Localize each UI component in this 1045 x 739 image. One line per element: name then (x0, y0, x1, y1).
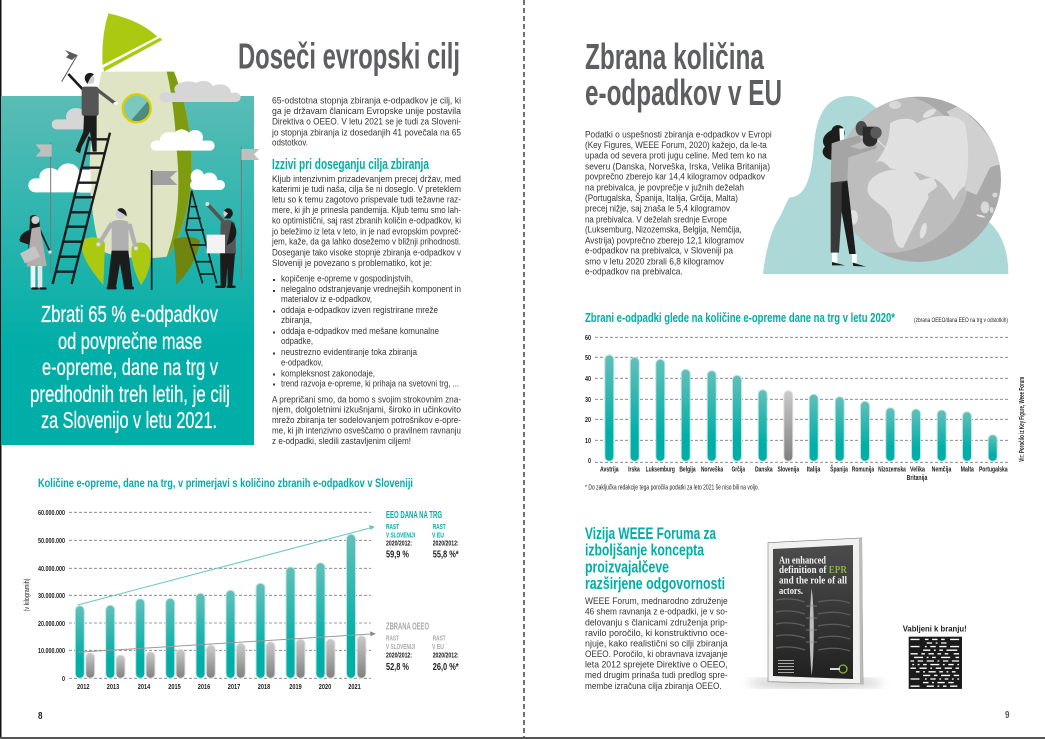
teal blob (763, 96, 1008, 274)
text block: EU overview: severu (Danska, Norveška, Irska, Velika Britanija) (585, 161, 770, 171)
list: problems: odpadke, (281, 336, 313, 346)
text block: challenges: Doseganje tako visoke stopnje zbiranja e-odpadkov v (272, 247, 461, 257)
text block: WEEE Forum: OEEO. Poročilo, ki obravnava izvajanje (585, 649, 728, 659)
text block: WEEE Forum: leta 2012 sprejete Direktive o OEEO, (585, 659, 728, 669)
goal statement: e-opreme, dane na trg v (42, 354, 218, 380)
book title: An enhanced (779, 555, 826, 566)
text block: EU overview: e-odpadkov na prebivalca, v Sloveniji pa (585, 246, 733, 256)
y axis unit: (v kilogramih) (22, 578, 31, 612)
text block: closing: mrežo zbiranja ter sodelovanjem potrošnikov e-opre- (272, 415, 461, 425)
heading: WEEE Forum vision: izboljšanje koncepta (585, 541, 704, 560)
text block: EU overview: e-odpadkov na prebivalca. (585, 267, 683, 277)
country labels: Irska (628, 465, 640, 474)
person: man with paper (205, 202, 236, 288)
text block: closing: z e-odpadki, sledili zastavljenim ciljem! (272, 436, 411, 446)
title: right page: e-odpadkov v EU (585, 72, 782, 113)
list: problems: e-odpadkov, (281, 357, 323, 367)
legend: EEE on market: RAST (433, 522, 446, 531)
country labels: Portugalska (979, 465, 1008, 474)
legend: collected WEEE: V SLOVENIJI (386, 642, 415, 651)
text block: intro: Direktiva o OEEO. V letu 2021 se je tudi za Sloveni- (272, 117, 461, 127)
text block: WEEE Forum: 46 shem ravnanja z e-odpadki, je v so- (585, 607, 728, 617)
text block: EU overview (585, 129, 772, 277)
text block: EU overview: precej nižje, saj znaša le 5,4 kilogramov (585, 204, 730, 214)
legend: collected WEEE: 2020/2012: (386, 651, 412, 660)
list: problems: nelegalno odstranjevanje vrednejših komponent in (281, 284, 461, 294)
heading: WEEE Forum vision (585, 524, 725, 593)
y axis labels: 50 (585, 353, 591, 362)
arrow: collected trend (78, 631, 376, 652)
country labels: Danska (755, 465, 773, 474)
list: problems: trend razvoja e-opreme, ki prihaja na svetovni trg, ... (281, 378, 459, 388)
list: problems: kopičenje e-opreme v gospodinjstvih, (281, 273, 413, 283)
y axis labels (585, 333, 591, 465)
text block: challenges: jem, kaže, da ga lahko dosežemo v bližnji prihodnosti. (271, 237, 461, 247)
y axis labels: 30.000.000 (38, 591, 65, 600)
legend: EEE on market: 59,9 % (386, 549, 409, 561)
y axis labels: 30 (585, 395, 591, 404)
footnote: * Do zaključka redakcije tega poročila podatki za leto 2021 še niso bili na voljo. (585, 482, 759, 491)
text block: closing (272, 394, 461, 446)
country labels: Luksemburg (646, 465, 675, 474)
y axis labels: 50.000.000 (38, 536, 65, 545)
text block: closing: njem, dolgoletnimi izkušnjami, široko in učinkovito (272, 404, 461, 414)
text block: challenges (271, 174, 461, 268)
legend: EEE on market: V SLOVENIJI (386, 531, 415, 540)
goal statement: predhodnih treh letih, je cilj (30, 381, 230, 407)
heading: WEEE Forum vision: razširjene odgovornosti (585, 574, 725, 593)
goal statement: Zbrati 65 % e-odpadkov (41, 301, 218, 327)
book small print (778, 660, 794, 673)
y axis labels: 20.000.000 (38, 619, 65, 628)
text block: intro: jo stopnja zbiranja iz dosedanjih 41 povečala na 65 (271, 127, 461, 137)
list: problems: materialov iz e-odpadkov, (281, 294, 372, 304)
heading: bottom chart: Količine e-opreme, dane na trg, v primerjavi s količino zbranih e-odpadkov v Sloveniji (38, 476, 413, 490)
QR call to action: Vabljeni k branju! (903, 624, 967, 634)
y axis labels: 0 (62, 674, 65, 683)
list: problems (273, 273, 461, 388)
text block: intro: 65-odstotna stopnja zbiranja e-odpadkov je cilj, ki (272, 96, 461, 106)
country labels: Belgija (679, 465, 696, 474)
x axis labels: 2021 (348, 682, 361, 691)
legend: collected WEEE: RAST (386, 634, 399, 643)
text block: WEEE Forum: med drugim prinaša tudi predlog spre- (585, 670, 728, 680)
legend: collected WEEE: V EU (432, 642, 444, 651)
text block: EU overview: smo v letu 2020 zbrali 6,8 kilogramov (585, 256, 724, 266)
text block: EU overview: (Portugalska, Španija, Italija, Grčija, Malta) (585, 193, 738, 203)
country labels: Romunija (852, 465, 875, 474)
list: problems: kompleksnost zakonodaje, (281, 368, 375, 378)
text block: EU overview: na prebivalca, je povprečje v južnih deželah (585, 182, 744, 192)
illustration: woman pinning globe (763, 93, 1008, 274)
x axis labels: 2020 (319, 682, 331, 691)
country labels: Španija (830, 465, 848, 474)
legend: collected WEEE: ZBRANA OEEO (386, 620, 429, 632)
country labels: Malta (961, 465, 975, 474)
x axis labels: 2015 (168, 682, 181, 691)
text block: WEEE Forum: WEEE Forum, mednarodno združenje (585, 596, 728, 606)
x axis labels: 2019 (289, 682, 302, 691)
list: problems: oddaja e-odpadkov med mešane komunalne (281, 326, 439, 336)
icon: porthole (123, 94, 151, 122)
text block: WEEE Forum: njuje, kako realistični so cilji zbiranja (585, 638, 728, 648)
chart: EEE on market vs collected (22, 508, 376, 691)
legend: EEE on market (386, 509, 459, 561)
text block: WEEE Forum: ravilo poročilo, ki konstruktivno oce- (585, 628, 728, 638)
heading: WEEE Forum vision: proizvajalčeve (585, 557, 669, 576)
illustration: rocket with people (20, 13, 259, 290)
country labels (600, 465, 1008, 482)
page number 8: 8 (38, 710, 43, 722)
list: problems: oddaja e-odpadkov izven registrirane mreže (281, 305, 438, 315)
text block: challenges: Kljub intenzivnim prizadevanjem precej držav, med (272, 174, 461, 184)
text block: challenges: katerimi je tudi naša, cilja še ni doseglo. V preteklem (272, 184, 461, 194)
legend: collected WEEE: 26,0 %* (433, 661, 459, 673)
heading: WEEE Forum vision: Vizija WEEE Foruma za (585, 524, 716, 543)
water ripples (776, 599, 850, 651)
text block: closing: A prepričani smo, da bomo s svojim strokovnim zna- (272, 394, 461, 404)
country labels: Nizozemska (878, 465, 906, 474)
globe (846, 96, 1001, 262)
chart: collection rates by country (585, 333, 1008, 482)
legend: collected WEEE: RAST (433, 634, 446, 643)
legend: EEE on market: RAST (386, 522, 399, 531)
country labels: Norveška (701, 465, 724, 474)
text block: WEEE Forum: delovanju s članicami združenja prip- (585, 617, 728, 627)
country labels: Italija (807, 465, 821, 474)
book title (779, 555, 848, 597)
grey bars (86, 636, 366, 678)
heading: challenges: Izzivi pri doseganju cilja zbiranja (272, 157, 430, 173)
text block: challenges: ko optimistični, saj rast zbranih količin e-odpadkov, ki (272, 216, 461, 226)
legend: EEE on market: 2020/2012: (386, 539, 412, 548)
title: right page (585, 36, 782, 113)
title: left page: Doseči evropski cilj (238, 36, 460, 76)
country labels: Nemčija (932, 465, 952, 474)
text block: WEEE Forum: membe izračuna cilja zbiranja OEEO. (585, 681, 722, 691)
panel: teal goal panel (1, 13, 259, 445)
icon: left ladder (53, 133, 110, 284)
y axis labels: 40.000.000 (38, 564, 65, 573)
arrow: market trend (78, 525, 375, 605)
y axis labels: 10 (585, 436, 591, 445)
legend: EEE on market: 55,8 %* (433, 549, 459, 561)
text block: EU overview: Podatki o uspešnosti zbiranja e-odpadkov v Evropi (585, 129, 772, 139)
country labels: Grčija (732, 465, 745, 474)
list: problems: neustrezno evidentiranje toka zbiranja (281, 347, 417, 357)
report book cover (747, 538, 883, 688)
text block: EU overview: (Luksemburg, Nizozemska, Belgija, Nemčija, (585, 225, 742, 235)
country labels: Velika (910, 465, 926, 474)
x axis labels: 2012 (77, 682, 90, 691)
x axis labels (77, 682, 361, 691)
chart note: (zbrana OEEO/dana EEO na trg v odstotkih) (914, 317, 1008, 324)
legend: EEE on market: V EU (432, 531, 444, 540)
x axis labels: 2018 (258, 682, 270, 691)
fins (82, 237, 200, 285)
teal bars (75, 534, 356, 678)
heading: collection chart: Zbrani e-odpadki glede na količine e-opreme dane na trg v letu 2020* (585, 310, 896, 325)
legend: EEE on market: EEO DANA NA TRG (386, 509, 442, 521)
list: problems: zbiranja, (281, 315, 312, 325)
book title: definition of EPR (779, 565, 848, 576)
text block: EU overview: Avstrija) povprečno zberejo 12,1 kilogramov (585, 235, 744, 245)
text block: challenges: Sloveniji je povezano s problematiko, kot je: (272, 258, 432, 268)
Slovenia bar (784, 391, 793, 461)
clouds (28, 81, 241, 193)
x axis labels: 2016 (198, 682, 210, 691)
person: woman with folder (20, 215, 52, 290)
flags (36, 142, 259, 290)
goal statement (30, 301, 230, 433)
x axis labels: 2017 (228, 682, 240, 691)
icon: rocket nose (102, 13, 162, 72)
text block: EU overview: na prebivalca. V deželah srednje Evrope (585, 214, 727, 224)
text block: EU overview: upada od severa proti jugu celine. Med tem ko na (585, 151, 767, 161)
x axis labels: 2014 (138, 682, 151, 691)
text block: intro (271, 96, 461, 148)
icon: rocket body (90, 72, 192, 258)
goal statement: od povprečne mase (58, 328, 202, 354)
icon: book logo (830, 665, 847, 673)
book title: and the role of all (779, 575, 847, 586)
person: woman (823, 125, 877, 267)
text block: EU overview: (Key Figures, WEEE Forum, 2020) kažejo, da le-ta (585, 140, 767, 150)
title: right page: Zbrana količina (585, 36, 765, 77)
legend: collected WEEE: 2020/2012: (433, 651, 459, 660)
y axis labels: 20 (585, 415, 591, 424)
y axis labels: 60 (585, 333, 591, 342)
source note: Vir: Poročilo iz Key Figure, Weee Forum (1017, 377, 1026, 462)
text block: challenges: jo beležimo iz leta v leto, in je nad evropskim povpreč- (271, 226, 461, 236)
country labels: Slovenija (777, 465, 800, 474)
teal country bars (605, 355, 997, 461)
person: man on ladder with flag (62, 50, 118, 153)
icon: rowing boat (806, 588, 817, 676)
person: man in centre (96, 208, 138, 289)
text block: intro: ga je državam članicam Evropske unije postavila (272, 106, 461, 116)
text block: challenges: mere, ki jih je prinesla pandemija. Kljub temu smo lah- (272, 205, 461, 215)
text block: intro: odstotkov. (272, 138, 308, 148)
x axis labels: 2013 (107, 682, 119, 691)
y axis labels: 0 (588, 456, 591, 465)
country labels: Avstrija (600, 465, 619, 474)
legend: collected WEEE (386, 620, 459, 673)
book title: actors. (779, 586, 803, 597)
y axis labels (38, 508, 65, 683)
text block: WEEE Forum (585, 596, 728, 691)
text block: EU overview: povprečno zberejo kar 14,4 kilogramov odpadkov (585, 172, 765, 182)
country labels: Britanija (907, 473, 928, 482)
legend: collected WEEE: 52,8 % (386, 661, 409, 673)
text block: closing: me, ki jih intenzivno osveščamo o pravilnem ravnanju (272, 426, 461, 436)
QR code (909, 637, 962, 689)
y axis labels: 40 (585, 374, 591, 383)
y axis labels: 10.000.000 (38, 646, 65, 655)
pin (856, 121, 889, 152)
legend: EEE on market: 2020/2012: (433, 539, 459, 548)
y axis labels: 60.000.000 (38, 508, 65, 517)
icon: right ladder (186, 191, 217, 283)
text block: challenges: letu so k temu zagotovo prispevale tudi težavne raz- (272, 195, 461, 205)
goal statement: za Slovenijo v letu 2021. (41, 407, 217, 433)
page number 9: 9 (1005, 709, 1010, 721)
